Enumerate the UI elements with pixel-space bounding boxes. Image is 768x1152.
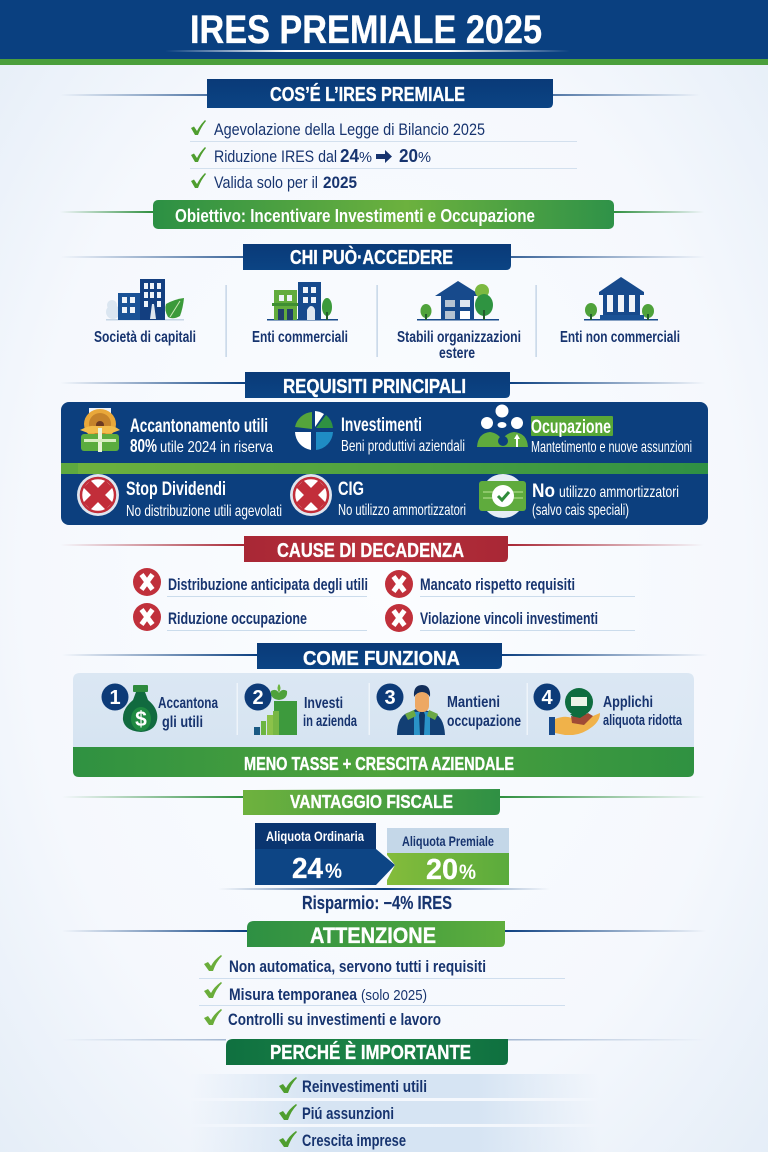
heading: perché è importante: PERCHÉ È IMPORTANTE <box>270 1041 471 1064</box>
checklist: attenzione: Misura temporanea <box>229 986 358 1004</box>
text: mantieni occupazione: Mantieni <box>447 694 500 711</box>
heading: attenzione <box>62 921 706 948</box>
text: ocupazione <box>531 416 692 456</box>
heading: chi può accedere <box>60 244 706 270</box>
text: cig: CIG <box>338 479 364 500</box>
checklist: definizione: 2025 <box>323 173 357 192</box>
heading: vantaggio fiscale: VANTAGGIO FISCALE <box>290 792 453 812</box>
list: cause: Distribuzione anticipata degli utili <box>168 576 368 594</box>
section: requisiti principali <box>60 372 708 525</box>
section: cos'è <box>60 79 704 229</box>
text: mantieni occupazione <box>447 694 521 730</box>
checklist: attenzione: Non automatica, servono tutti i requisiti <box>229 958 486 976</box>
heading: vantaggio fiscale <box>62 789 706 815</box>
icon: grafico investimenti <box>295 411 333 450</box>
checklist: definizione: % <box>359 149 372 166</box>
icon: stop dividendi <box>77 474 119 516</box>
text: accantonamento utili: Accantonamento utili <box>130 416 268 437</box>
text: investimenti <box>341 415 465 455</box>
icon: stabili organizzazioni estere <box>417 281 499 320</box>
label: stabili organizzazioni estere: estere <box>439 345 475 362</box>
text: no utilizzo ammortizzatori: No <box>532 481 555 502</box>
text: accantonamento utili: utile 2024 in riserva <box>160 439 273 456</box>
icon: cig <box>290 474 332 516</box>
header band <box>0 0 768 65</box>
list: cause <box>133 568 635 632</box>
text: no utilizzo ammortizzatori <box>532 481 679 519</box>
list: benefici: Reinvestimenti utili <box>302 1078 427 1096</box>
icon: accantonamento <box>80 408 120 452</box>
card: aliquota premiale <box>387 828 509 886</box>
panel: passaggi <box>73 673 694 777</box>
checklist: definizione: 20 <box>399 146 418 166</box>
section: chi può accedere <box>60 244 706 362</box>
banner: meno tasse <box>73 747 694 777</box>
step 3 <box>376 684 445 735</box>
card: aliquota ordinaria: Aliquota Ordinaria <box>266 828 364 844</box>
checklist: definizione: Agevolazione della Legge di Bilancio 2025 <box>214 120 485 139</box>
list: benefici: Crescita imprese <box>302 1132 406 1150</box>
label: società di capitali: Società di capitali <box>94 329 196 346</box>
text: accantonamento utili <box>130 416 273 456</box>
card: aliquota premiale: Aliquota Premiale <box>402 833 494 849</box>
text: applichi <box>603 694 683 729</box>
heading: cause di decadenza: CAUSE DI DECADENZA <box>277 540 464 562</box>
panel: requisiti <box>61 402 708 525</box>
text: mantieni occupazione: occupazione <box>447 713 521 730</box>
checklist: attenzione: Controlli su investimenti e lavoro <box>228 1011 441 1029</box>
text: ocupazione: Ocupazione <box>531 417 611 438</box>
section: attenzione <box>62 921 706 1029</box>
text: investimenti: Investimenti <box>341 415 422 436</box>
section: perché è importante <box>62 1039 706 1152</box>
heading: cos'è l'ires premiale: COS’É L’IRES PREMIALE <box>270 83 465 106</box>
step 1: 1 <box>109 687 121 709</box>
label: enti commerciali: Enti commerciali <box>252 329 348 346</box>
checklist: definizione: 24 <box>340 146 359 166</box>
step 2 <box>244 684 297 735</box>
step 1 <box>102 684 218 732</box>
heading: requisiti principali <box>60 372 706 398</box>
text: no utilizzo ammortizzatori: (salvo cais speciali) <box>532 502 629 519</box>
heading: cause di decadenza <box>60 536 704 562</box>
heading: chi può accedere: CHI PUÒ·ACCEDERE <box>290 245 453 269</box>
heading: cos'è l'ires premiale <box>60 79 700 108</box>
checklist: definizione: Valida solo per il <box>214 173 318 192</box>
icon: persone occupazione <box>477 404 528 447</box>
list: cause: Violazione vincoli investimenti <box>420 610 598 628</box>
banner: meno tasse: MENO TASSE + CRESCITA AZIENDALE <box>244 754 514 774</box>
step 1: gli utili <box>162 714 203 731</box>
icon: enti non commerciali <box>584 277 658 320</box>
text: stop dividendi: Stop Dividendi <box>126 479 226 500</box>
checklist: definizione: % <box>418 149 431 166</box>
list: cause: Mancato rispetto requisiti <box>420 576 575 594</box>
banner: obiettivo <box>60 200 704 229</box>
checklist: attenzione: (solo 2025) <box>361 987 427 1004</box>
step 2: 2 <box>252 687 264 709</box>
text: investi <box>303 695 357 730</box>
step 3: 3 <box>384 687 396 709</box>
text: applichi: aliquota ridotta <box>603 713 683 729</box>
heading: requisiti principali: REQUISITI PRINCIPALI <box>283 376 466 398</box>
checklist: attenzione <box>199 955 565 1029</box>
text: accantonamento utili: 80% <box>130 436 157 456</box>
heading: come funziona: COME FUNZIONA <box>303 648 460 670</box>
text: ocupazione: Mantetimento e nuove assunzioni <box>531 439 692 456</box>
text: investimenti: Beni produttivi aziendali <box>341 438 465 455</box>
heading: attenzione: ATTENZIONE <box>310 923 436 948</box>
list: benefici <box>190 1074 600 1152</box>
text: stop dividendi: No distribuzione utili agevolati <box>126 503 282 520</box>
icon: società di capitali <box>106 279 184 320</box>
step 4 <box>534 684 600 735</box>
label: enti non commerciali: Enti non commerciali <box>560 329 680 346</box>
step 1: $ <box>135 708 147 731</box>
text: applichi: Applichi <box>603 694 653 711</box>
section: come funziona <box>62 643 708 777</box>
list: benefici: Piú assunzioni <box>302 1105 394 1123</box>
checklist: definizione <box>190 120 577 192</box>
card: aliquota premiale: % <box>459 861 476 884</box>
icon: enti commerciali <box>267 282 338 320</box>
card: aliquota ordinaria <box>255 823 395 885</box>
text: cig <box>338 479 466 519</box>
text: risparmio: Risparmio: −4% IRES <box>302 893 452 913</box>
label: stabili organizzazioni estere <box>397 329 521 362</box>
text: investi: Investi <box>304 695 343 712</box>
label: stabili organizzazioni estere: Stabili organizzazioni <box>397 329 521 346</box>
section: cause di decadenza <box>60 536 704 632</box>
heading: come funziona <box>62 643 708 670</box>
text: investi: in azienda <box>303 713 357 730</box>
step 1: Accantona <box>158 695 218 712</box>
list: cause: Riduzione occupazione <box>168 610 307 628</box>
section: vantaggio fiscale <box>62 789 706 913</box>
text: no utilizzo ammortizzatori: utilizzo ammortizzatori <box>559 484 679 501</box>
checklist: definizione: Riduzione IRES dal <box>214 147 337 166</box>
icon: banconota con spunta <box>479 474 526 518</box>
banner: obiettivo: Obiettivo: Incentivare Investimenti e Occupazione <box>175 206 535 226</box>
text: stop dividendi <box>126 479 282 520</box>
step 4: 4 <box>541 687 553 709</box>
card: aliquota premiale: 20 <box>426 854 458 886</box>
title: IRES PREMIALE 2025 <box>190 8 542 52</box>
text: cig: No utilizzo ammortizzatori <box>338 502 466 519</box>
card: aliquota ordinaria: % <box>325 860 342 883</box>
card: aliquota ordinaria: 24 <box>292 853 323 885</box>
